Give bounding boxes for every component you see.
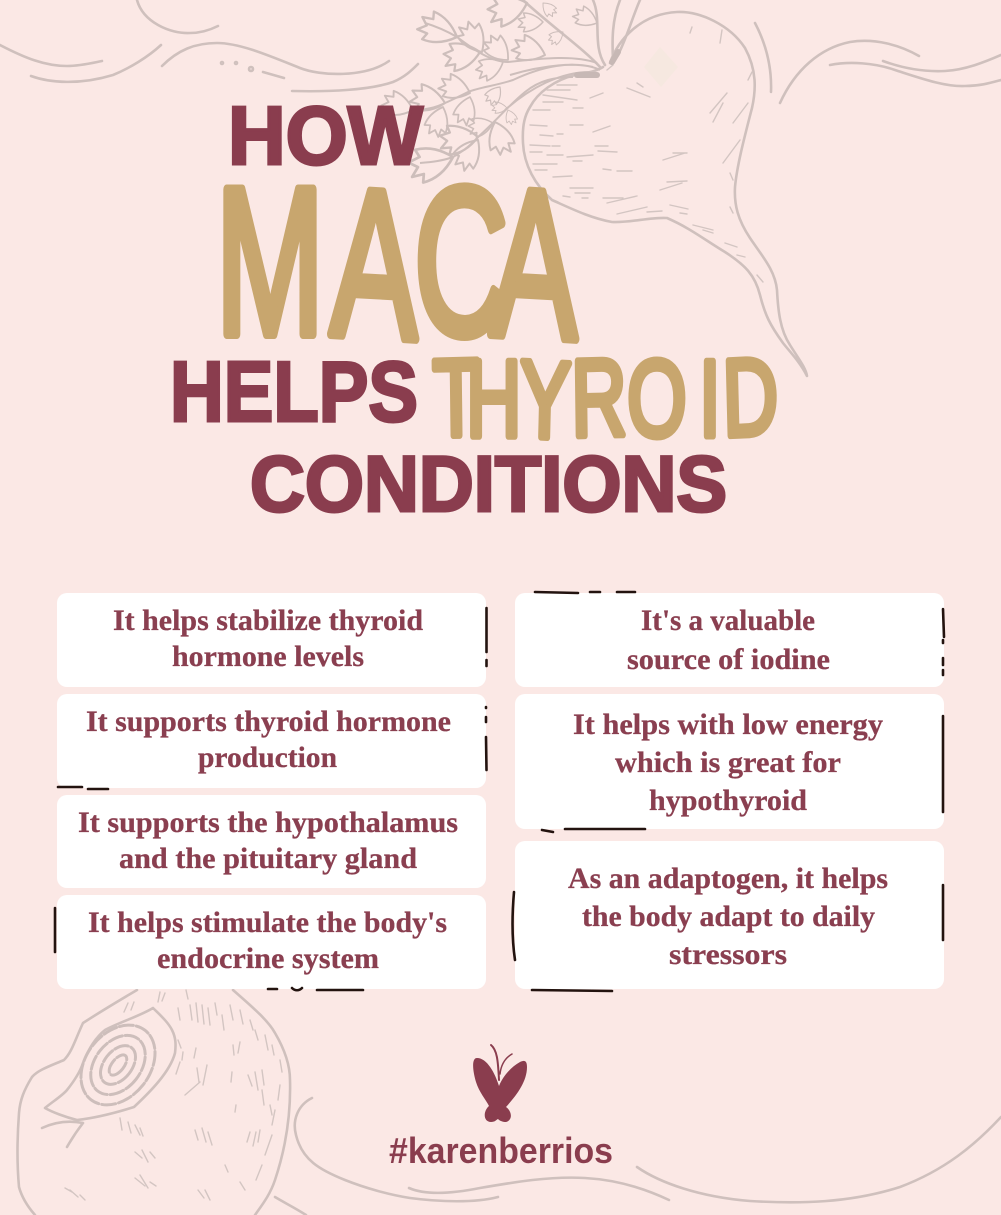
leaves — [379, 0, 601, 185]
title — [170, 89, 779, 528]
title word: MACA: MACA — [216, 145, 581, 385]
card: hypothalamus and pituitary: It supports the hypothalamus — [78, 806, 458, 839]
stems — [523, 0, 640, 67]
title word: THYROID: THYROID — [432, 335, 779, 462]
cut root outline — [18, 990, 306, 1215]
title word: HOW: HOW — [228, 89, 424, 182]
illustration: cut maca root, bottom left — [18, 990, 306, 1215]
background swooshes: bottom — [295, 1098, 1001, 1202]
card: low energy: which is great for — [615, 746, 841, 779]
card: source of iodine — [515, 593, 944, 687]
cut section — [45, 1008, 176, 1120]
root hatching — [530, 27, 763, 282]
card: hormone production: It supports thyroid hormone — [86, 705, 451, 738]
card: adaptogen — [515, 841, 944, 989]
card: hormone production — [57, 694, 486, 788]
card: hormone production: production — [198, 741, 337, 774]
diamond highlight — [644, 47, 678, 87]
card: low energy: hypothyroid — [649, 784, 807, 817]
card: stabilize hormone levels — [57, 593, 486, 687]
card: adaptogen: As an adaptogen, it helps — [568, 862, 888, 895]
panel: right column benefits — [515, 593, 944, 989]
card: low energy — [515, 694, 944, 829]
hand-drawn dashes along card edges — [55, 592, 944, 991]
card: endocrine system: It helps stimulate the body's — [88, 906, 447, 939]
card: source of iodine: source of iodine — [627, 643, 830, 676]
card: source of iodine: It's a valuable — [641, 604, 815, 637]
growth rings — [66, 1011, 170, 1119]
title word: CONDITIONS: CONDITIONS — [250, 439, 727, 528]
background swooshes: top — [0, 0, 1001, 103]
card: low energy: It helps with low energy — [573, 708, 883, 741]
card: adaptogen: stressors — [669, 938, 787, 971]
title word: HELPS: HELPS — [170, 345, 418, 440]
cut root hatching — [65, 990, 282, 1200]
card: stabilize hormone levels: It helps stabilize thyroid — [113, 604, 423, 637]
card: endocrine system — [57, 895, 486, 989]
stem base shadow — [577, 72, 597, 78]
card: stabilize hormone levels: hormone levels — [172, 640, 364, 673]
hashtag credit: #karenberrios — [389, 1130, 613, 1171]
panel: left column benefits — [57, 593, 486, 989]
card: hypothalamus and pituitary — [57, 795, 486, 888]
card: endocrine system: endocrine system — [157, 942, 379, 975]
card: hypothalamus and pituitary: and the pituitary gland — [119, 842, 417, 875]
root outline — [523, 12, 807, 376]
card: adaptogen: the body adapt to daily — [582, 900, 875, 933]
icon: maroon plant logo — [473, 1045, 527, 1122]
illustration: maca root with leaves — [379, 0, 807, 376]
